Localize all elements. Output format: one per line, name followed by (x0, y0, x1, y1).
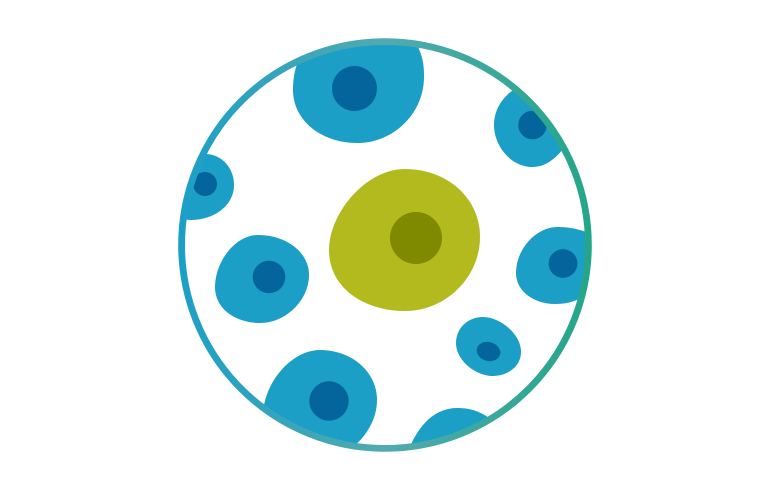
circular boundary ring (182, 42, 588, 448)
cells clipped to the circle (186, 45, 585, 444)
cell: bottom left blue (264, 350, 377, 450)
cell: left blue (186, 154, 234, 220)
cell: top blue (293, 45, 424, 143)
cell: central yellow-green (329, 169, 480, 311)
diagram: cells inside circular boundary (178, 38, 592, 452)
cell: small oval blue (456, 317, 521, 376)
cell: top right blue (494, 90, 562, 167)
cell: right blue (516, 227, 585, 304)
cell: bottom blue (412, 408, 488, 444)
cell: mid left blue (215, 235, 309, 323)
